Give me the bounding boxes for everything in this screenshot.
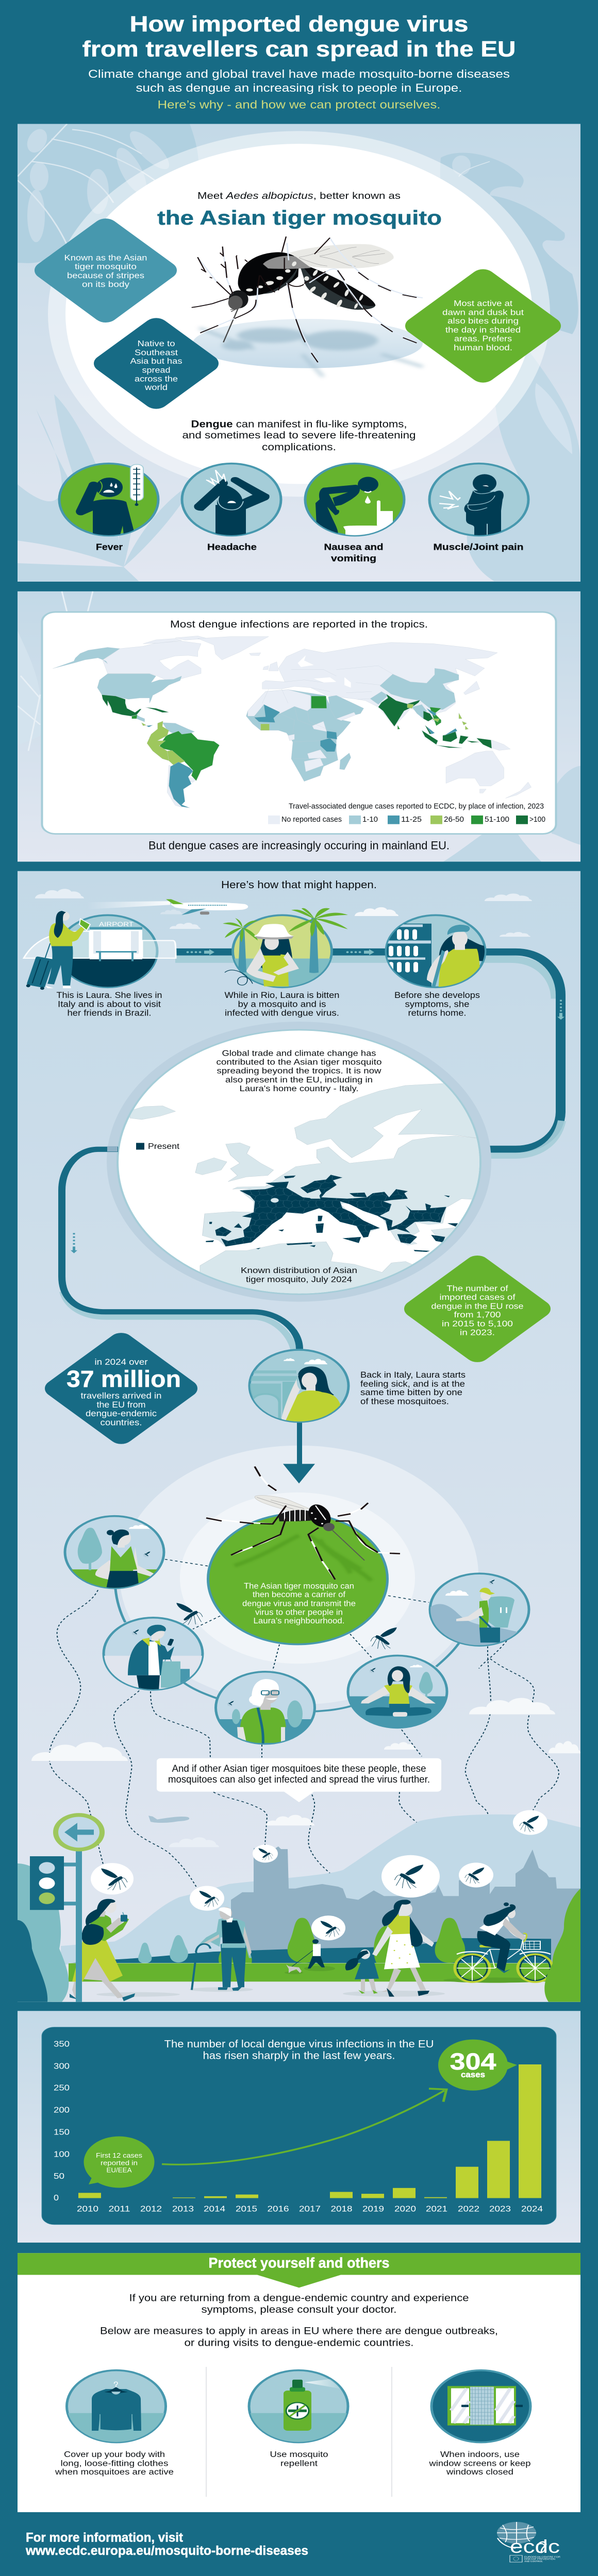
map circle: distribution of Asian tiger mosquito [107,1022,491,1302]
text: dengue symptoms: complications. [262,441,336,452]
text: global trade: also present in the EU, including in [225,1076,373,1084]
callout: stripes: tiger mosquito [75,262,137,272]
callout: spread further [157,1758,441,1802]
callout: most active: the day in shaded [445,326,521,335]
text: meet: Meet Aedes albopictus, better known as [197,191,401,201]
callout: 304 cases [438,2040,517,2091]
logo: ECDC: ecdc [510,2536,560,2557]
legend: map: No reported cases [281,815,342,824]
logo: ECDC: EUROPEAN CENTRE FOR [524,2556,560,2558]
icon: muscle joint pain [429,464,528,538]
callout: 37 million travellers: in 2024 over [95,1358,148,1367]
chart: y axis labels: 0 [54,2194,59,2202]
illustration: street scene [18,1815,580,2002]
caption: clothing [55,2450,174,2477]
text: advice: symptoms, please consult your doctor. [201,2304,397,2315]
caption: clothing: when mosquitoes are active [55,2468,174,2477]
callout: 304 cases: 304 [450,2049,496,2075]
illustration: Laura at the airport: AIRPORT [99,921,134,928]
person: walking dog [286,1939,325,1973]
chart: y axis labels: 300 [54,2062,70,2071]
caption: repellent: Use mosquito [270,2450,328,2459]
caption: window screens [429,2450,531,2477]
circle: mosquito transmits: The Asian tiger mosquito can [244,1582,354,1591]
chart: x axis labels: 2010 [77,2205,98,2214]
subtitle: such as dengue an increasing risk to people in Europe. [136,81,462,94]
callout: native [106,327,206,400]
illustration: man with shopping [101,1618,209,1693]
arrow: rise [162,2089,446,2164]
text: this is Laura: her friends in Brazil. [67,1008,152,1018]
footer: more information [25,2531,308,2558]
callout: stripes: on its body [82,280,129,289]
callout: 37 million travellers: countries. [100,1418,142,1428]
icon: repellent [246,2370,350,2447]
text: this is Laura [56,991,162,1018]
callout: most active: human blood. [454,344,512,352]
chart: x axis labels: 2014 [204,2205,225,2214]
callout: stripes: because of stripes [67,272,144,280]
callout: most active: Most active at [454,299,513,308]
leaf decoration [18,591,580,861]
chart: x axis labels: 2011 [109,2205,130,2214]
labels: symptoms: vomiting [331,553,376,564]
heading: the Asian tiger mosquito: the Asian tiger mosquito [157,207,442,229]
callout: 304 cases: cases [461,2070,485,2079]
callout: imported cases: The number of [446,1284,508,1293]
illustration: mosquito [192,236,423,377]
heading: local infections: has risen sharply in the last few years. [203,2050,395,2061]
legend: map: 26-50 [444,815,464,824]
callout: spread further: mosquitoes can also get infected and spread the virus further. [168,1774,430,1785]
text: advice: If you are returning from a dengue-endemic country and experience [129,2292,469,2303]
caption: window screens: windows closed [446,2468,513,2477]
text: global trade [217,1049,381,1093]
text: back in Italy: same time bitten by one [360,1388,462,1397]
icon: window screens [431,2370,530,2443]
icon: clothing [64,2370,168,2447]
text: this is Laura: Italy and is about to visit [58,999,161,1009]
icon: road sign and traffic light [30,1815,102,2002]
icon: nausea [305,464,404,538]
text: this is Laura: This is Laura. She lives in [56,991,162,1000]
heading: protect yourself and others [18,2253,580,2287]
callout: native: world [144,383,168,392]
text: while in Rio: While in Rio, Laura is bitten [224,991,339,1000]
caption: known distribution: tiger mosquito, July 2024 [246,1275,352,1284]
chart: x axis labels: 2017 [299,2205,321,2214]
chart: y axis labels [54,2040,70,2202]
circle: mosquito transmits: virus to other people in [255,1608,343,1617]
panel: how it might happen [18,871,580,2002]
callout: imported cases: in 2015 to 5,100 [442,1319,513,1329]
arrow: second path to Laura back home [62,1149,300,1349]
callout: most active: areas. Prefers [454,334,512,344]
illustration: woman in park [62,1516,170,1592]
subtitle [88,67,510,111]
callout: 37 million travellers [57,1342,185,1435]
panel: the Asian tiger mosquito [18,124,580,582]
callout: stripes [47,228,164,314]
illustration: older woman [211,1672,320,1748]
chart: x axis labels [77,2205,543,2214]
callout: most active: dawn and dusk but [442,308,524,317]
legend: map: >100 [529,815,545,824]
callout: most active: also bites during [447,317,519,326]
text: mainland EU: But dengue cases are increasingly occuring in mainland EU. [148,839,450,852]
callout: 37 million travellers: the EU from [97,1400,146,1410]
footer: more information: For more information, visit [26,2531,183,2545]
callout: first 12 cases [84,2137,155,2188]
callout: native: Native to [137,340,175,348]
title: from travellers can spread in the EU [82,37,516,61]
circle: mosquito transmits: Laura’s neighbourhood. [254,1617,344,1625]
legend: map: 11-25 [401,815,422,824]
text: advice: or during visits to dengue-endemic countries. [185,2337,414,2348]
caption: clothing: long, loose-fitting clothes [61,2459,169,2468]
icon: fever [59,464,158,537]
text: back in Italy: of these mosquitoes. [360,1397,449,1406]
subtitle: Here’s why - and how we can protect ourselves. [158,98,440,111]
dotted spread lines [49,1560,559,1916]
arrow: path from airport to Rio and home [175,952,562,1156]
icon: plane distant [148,1816,189,1823]
callout: first 12 cases: EU/EEA [107,2167,132,2174]
clouds top [35,889,532,937]
callout: stripes: Known as the Asian [64,253,147,263]
text: global trade: Global trade and climate change has [222,1049,376,1058]
chart: x axis labels: 2018 [331,2205,353,2214]
chart: x axis labels: 2012 [140,2205,162,2214]
callout: spread further: And if other Asian tiger mosquitoes bite these people, these [172,1763,426,1774]
text: global trade: contributed to the Asian tiger mosquito [217,1058,382,1067]
text: dengue symptoms: and sometimes lead to severe life-threatening [182,430,416,440]
legend: map: 1-10 [362,815,378,824]
footer: more information: www.ecdc.europa.eu/mosquito-borne-diseases [25,2544,308,2558]
text: back in Italy [360,1370,466,1406]
chart: y axis labels: 250 [54,2083,70,2093]
callout: 37 million travellers: dengue-endemic [86,1409,157,1418]
clouds lower [31,1698,580,1847]
callout: native: Asia but has [130,357,182,366]
arrow marks on path [187,949,564,1020]
illustration: Laura feeling sick [250,1350,348,1423]
chart: Europe map [130,1083,482,1295]
labels: symptoms [96,543,524,564]
legend: present: Present [148,1142,180,1151]
text: before she develops: Before she develops [394,991,480,1000]
mosquito bubbles [91,1810,547,1940]
person: cyclist [455,1903,553,1982]
illustration: woman meditating [345,1655,454,1732]
card: world map [42,612,556,834]
title [82,12,516,61]
small mosquitoes [176,1603,397,1649]
text: back in Italy: Back in Italy, Laura starts [360,1370,466,1380]
callout: imported cases: imported cases of [440,1293,516,1302]
text: advice: Below are measures to apply in areas in EU where there are dengue outbreaks, [100,2325,498,2336]
panel: chart [18,2011,580,2243]
logo: ECDC: AND CONTROL [524,2561,543,2563]
illustration: hiker [428,1573,531,1652]
text: global trade: spreading beyond the tropics. It is now [217,1066,381,1076]
legend: map [268,815,545,824]
panel: protect yourself [18,2253,580,2512]
circle: mosquito transmits [208,1514,388,1645]
chart: x axis labels: 2020 [394,2205,416,2214]
chart: x axis labels: 2023 [489,2205,511,2214]
chart: bars [78,2064,541,2198]
chart: x axis labels: 2024 [521,2205,543,2214]
heading: protect yourself and others: Protect yourself and others [208,2256,390,2271]
card: bar chart [42,2027,556,2225]
title: How imported dengue virus [130,12,469,36]
pale halo behind green circle [120,1446,478,1705]
labels: symptoms: Fever [96,543,123,552]
chart: world choropleth map [53,636,531,808]
legend: map: 51-100 [485,815,509,824]
caption: window screens: When indoors, use [440,2450,520,2459]
callout: native: spread [142,366,171,375]
text: dengue symptoms: Dengue can manifest in flu-like symptoms, [191,418,407,429]
chart: x axis labels: 2015 [236,2205,257,2214]
caption: clothing: Cover up your body with [64,2450,165,2459]
text: dengue symptoms [182,418,416,452]
callout: native: Southeast [135,348,178,358]
chart: x axis labels: 2019 [362,2205,384,2214]
connection lines: people [115,1589,459,1711]
person: old man with cane [192,1907,252,1991]
labels: symptoms: Muscle/Joint pain [434,543,524,552]
icon: headache [182,464,281,538]
text: while in Rio: by a mosquito and is [238,999,326,1009]
callout: imported cases: from 1,700 [454,1311,501,1319]
chart: y axis labels: 200 [54,2106,70,2115]
illustration: Laura at the airport [24,911,176,992]
person: mother and child [345,1900,434,1997]
callout: imported cases [417,1264,538,1353]
caption: repellent: repellent [280,2459,318,2468]
labels: symptoms: Headache [207,543,257,552]
illustration: mosquito on circle [206,1467,400,1580]
arrow: to the mosquito [283,1422,315,1483]
text: advice [100,2292,498,2348]
heading: local infections [164,2038,434,2061]
callout: imported cases: dengue in the EU rose [431,1302,524,1311]
callout: native: across the [135,375,178,384]
callout: first 12 cases: First 12 cases [96,2152,142,2159]
chart: y axis labels: 50 [54,2172,64,2181]
text: before she develops: returns home. [408,1008,467,1018]
callout: most active [418,278,549,374]
chart: y axis labels: 100 [54,2150,70,2159]
text: before she develops: symptoms, she [405,999,470,1009]
logo: ECDC [497,2522,560,2563]
leaf decoration [18,124,580,582]
arch [48,131,550,497]
text: while in Rio [224,991,339,1018]
panel: world map [18,591,580,861]
legend: present [136,1142,180,1151]
circle: mosquito transmits: dengue virus and transmit the [242,1599,356,1608]
caption: known distribution [241,1266,357,1284]
chart: y axis labels: 150 [54,2128,70,2137]
chart: x axis labels: 2016 [267,2205,289,2214]
chart: y axis labels: 350 [54,2040,70,2049]
illustration: Laura in Rio [223,908,348,992]
labels: symptoms: Nausea and [324,543,384,552]
callout: 37 million travellers: travellers arrived in [80,1391,162,1401]
chart: x axis labels: 2021 [426,2205,447,2214]
chart: x axis labels: 2013 [172,2205,194,2214]
callout: 37 million travellers: 37 million [67,1366,181,1392]
illustration: Laura returning home [384,915,487,995]
heading: local infections: The number of local dengue virus infections in the EU [164,2038,434,2050]
caption: known distribution: Known distribution of Asian [241,1266,357,1275]
text: back in Italy: feeling sick, and is at the [360,1379,465,1388]
heading: here's how: Here’s how that might happen. [221,879,377,891]
circle: mosquito transmits: then become a carrier of [253,1590,346,1599]
caption: repellent [270,2450,328,2468]
icon: plane [87,899,248,915]
logo: ECDC: DISEASE PREVENTION [524,2558,555,2561]
text: global trade: Laura's home country - Italy. [239,1084,359,1093]
text: before she develops [394,991,480,1018]
callout: imported cases: in 2023. [460,1328,495,1337]
text: while in Rio: infected with dengue virus. [225,1008,339,1018]
subtitle: Climate change and global travel have made mosquito-borne diseases [88,67,510,80]
heading: tropics: Most dengue infections are reported in the tropics. [170,618,428,630]
callout: first 12 cases: reported in [101,2160,138,2167]
caption: window screens: window screens or keep [429,2459,531,2468]
foreground foliage [18,1863,580,2002]
chart: x axis labels: 2022 [458,2205,479,2214]
person: woman with drink [70,1899,135,2001]
